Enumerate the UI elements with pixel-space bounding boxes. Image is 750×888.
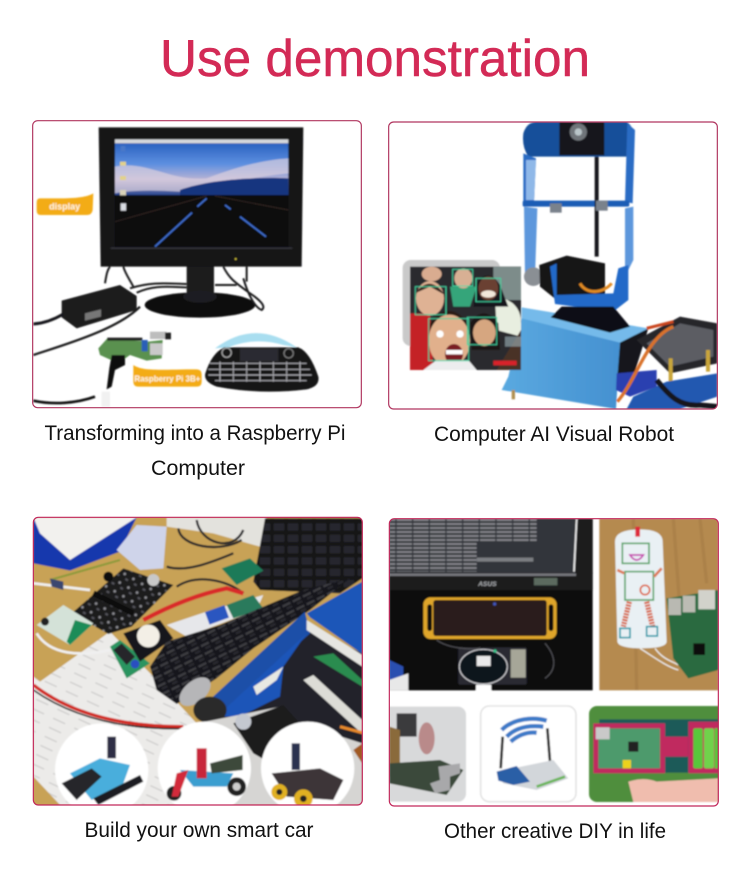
badge: Raspberry Pi 3B+: Raspberry Pi 3B+: [134, 374, 200, 384]
caption: smart car: Build your own smart car: [84, 819, 314, 842]
panel: smart car: [33, 517, 362, 817]
image: battery powered Pi: [589, 706, 726, 802]
caption: AI visual robot: Computer AI Visual Robot: [434, 423, 674, 446]
icon: blue robot arm: [523, 122, 635, 312]
badge: display: [37, 193, 93, 215]
icon: Raspberry Pi board: [98, 332, 171, 407]
image: paper robot: [599, 519, 718, 690]
title: Use demonstration: [160, 30, 590, 88]
badge: Raspberry Pi 3B+: [133, 365, 202, 387]
image: speaker project: [389, 519, 593, 691]
caption: creative DIY: Other creative DIY in life: [444, 820, 666, 843]
image: speaker project: ASUS: [477, 581, 497, 588]
badge: display: display: [49, 201, 80, 211]
icon: power adapter and cables: [33, 267, 263, 403]
icon: monitor: [99, 127, 303, 318]
icon: controller board and wires: [616, 317, 717, 409]
image: tracked robot: [150, 578, 362, 805]
panel: creative DIY: [380, 519, 726, 806]
image: workbench background: [33, 517, 362, 805]
caption: Raspberry Pi computer: Computer: [151, 457, 245, 480]
image: face detection photo: [403, 260, 521, 370]
icon: three-wheel robot in circle: [158, 722, 251, 815]
caption: Raspberry Pi computer: Transforming into a Raspberry Pi: [44, 422, 346, 445]
image: wireless router: [481, 706, 576, 802]
caption: Raspberry Pi computer: [44, 422, 346, 480]
icon: tank robot in circle: [54, 723, 148, 804]
icon: four-wheel robot in circle: [261, 722, 354, 815]
image: circuit boards: [37, 568, 263, 678]
icon: wireless keyboard: [205, 333, 319, 392]
panel: Raspberry Pi computer: [33, 121, 361, 408]
image: amplifier board: [380, 707, 466, 802]
icon: blue box base: [502, 307, 648, 409]
panel: AI visual robot: [389, 122, 717, 409]
